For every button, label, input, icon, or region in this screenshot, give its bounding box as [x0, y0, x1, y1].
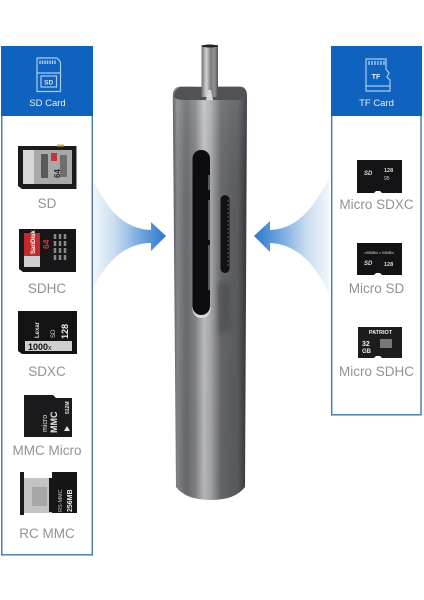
label: Micro SDXC: Micro SDXC — [339, 197, 414, 212]
card: Micro SDXC: 95 — [384, 176, 390, 182]
arrow: right panel to device — [254, 178, 329, 294]
slot: SD — [192, 150, 211, 318]
device top face — [174, 87, 246, 100]
card: Micro SDHC: PATRIOT — [369, 330, 393, 336]
card: MMC Micro: MMC — [49, 411, 59, 433]
card: RC MMC: 256MB — [67, 489, 74, 512]
arrow: left panel to device — [93, 181, 166, 289]
icon: SD card outline: SD — [44, 80, 54, 86]
card: RC MMC — [20, 472, 77, 515]
card: Micro SDXC: SD — [364, 171, 373, 177]
label: SDXC: SDXC — [28, 364, 66, 379]
label: SD: SD — [38, 196, 57, 211]
card: MMC Micro: 512M — [65, 401, 71, 414]
card: RC MMC: RS-MMC — [58, 489, 64, 512]
label: Micro SD: Micro SD — [349, 281, 404, 296]
label: RC MMC: RC MMC — [19, 526, 75, 541]
card: SD: 64 — [53, 169, 62, 178]
slot: TF — [220, 195, 230, 273]
card: SDXC: 128 — [60, 324, 70, 339]
panel header: SD Card — [1, 46, 93, 116]
card: SDHC: SanDisk — [31, 230, 37, 254]
card: Micro SD — [357, 243, 402, 275]
panel: TF card types — [331, 46, 422, 415]
card: SDXC: SD — [51, 329, 57, 338]
device: card reader — [173, 44, 247, 500]
card: Micro SD: SD — [364, 261, 373, 267]
label: SDHC: SDHC — [28, 281, 66, 296]
panel: SD card types — [1, 46, 93, 555]
card: MMC Micro — [24, 395, 72, 437]
card: Micro SDXC — [357, 160, 402, 193]
label: MMC Micro: MMC Micro — [12, 443, 82, 458]
device body — [173, 86, 247, 500]
panel header: TF Card — [331, 46, 422, 116]
card: SD — [18, 144, 76, 189]
scuff mark — [218, 282, 231, 335]
card: SDXC: Lexar — [35, 321, 41, 338]
card: SDHC: 64 — [41, 239, 51, 249]
card: Micro SD: 128 — [384, 262, 393, 268]
card: Micro SDHC: 32 — [362, 341, 370, 348]
card: Micro SDXC: 128 — [384, 168, 393, 174]
device shading — [173, 86, 247, 500]
card: Micro SDHC — [358, 327, 402, 358]
heading: TF Card: TF Card — [359, 98, 394, 109]
card: Micro SD: ×95MB/s ≡ 90MB/s — [364, 251, 394, 255]
icon: TF card outline: TF — [372, 74, 381, 81]
card: MMC Micro: micro — [42, 415, 49, 432]
cable connector — [202, 44, 218, 100]
label: Micro SDHC: Micro SDHC — [339, 364, 414, 379]
card: SDXC — [18, 311, 77, 354]
card: SDXC: 1000x — [28, 342, 52, 352]
card: SDHC — [19, 229, 76, 272]
card: Micro SDHC: GB — [362, 349, 372, 355]
heading: SD Card: SD Card — [29, 98, 66, 109]
